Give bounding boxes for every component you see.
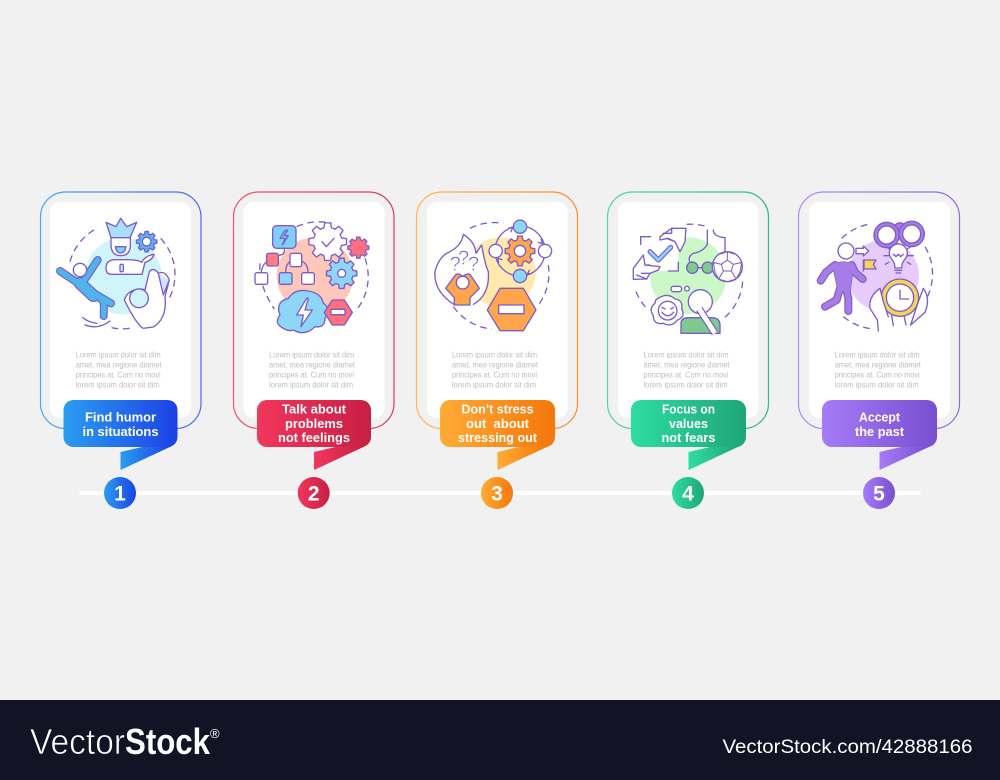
- text block: lorem ipsum: [835, 350, 921, 390]
- callout: talk about problems not feelings: problems: [285, 416, 343, 431]
- text block: lorem ipsum: amet, mea regione diamet: [644, 360, 730, 370]
- number badge 5: 5: [873, 482, 885, 506]
- panel: step 4 focus on values: [608, 192, 768, 509]
- text block: lorem ipsum: amet, mea regione diamet: [269, 360, 356, 370]
- callout: talk about problems not feelings: [257, 400, 371, 470]
- number badge 3: [481, 477, 513, 509]
- image id: VectorStock.com/42888166: [722, 737, 972, 758]
- text block: lorem ipsum: [452, 350, 539, 390]
- callout: find humor in situations: [64, 400, 178, 470]
- callout: focus on values not fears: values: [669, 416, 708, 431]
- panel: step 2 talk about problems: [234, 192, 394, 509]
- icon: stressed person in flames, gear cycle and stop sign: ?: [458, 247, 469, 269]
- text block: lorem ipsum: lorem ipsum dolor sit dim: [76, 380, 160, 390]
- icon: flowchart, gears and cloud: [255, 222, 369, 333]
- text block: lorem ipsum: amet, mea regione diamet: [452, 360, 539, 370]
- number badge 2: [298, 477, 330, 509]
- footer bar: [0, 700, 1000, 780]
- callout: focus on values not fears: not fears: [662, 430, 716, 445]
- callout: focus on values not fears: [631, 400, 746, 470]
- icon: stressed person in flames, gear cycle and stop sign: [435, 220, 552, 331]
- text block: lorem ipsum: Lorem ipsum dolor sit dim: [644, 350, 729, 360]
- icon: falling person, jester and ok hand: [60, 218, 175, 329]
- callout: don't stress out about stressing out: stressing out: [458, 430, 538, 445]
- panel: step 1 find humor: [40, 192, 201, 509]
- callout: find humor in situations: Find humor: [85, 410, 156, 425]
- text block: lorem ipsum: principes at. Cum no movi: [452, 370, 537, 380]
- number badge 2: 2: [308, 482, 320, 506]
- icon: stressed person in flames, gear cycle and stop sign: ?: [450, 253, 461, 275]
- text block: lorem ipsum: Lorem ipsum dolor sit dim: [269, 350, 354, 360]
- number badge 5: [863, 477, 895, 509]
- callout: find humor in situations: in situations: [82, 424, 158, 439]
- text block: lorem ipsum: Lorem ipsum dolor sit dim: [76, 350, 161, 360]
- number badge 1: 1: [114, 482, 126, 506]
- panel: step 5 accept the past: [798, 192, 960, 509]
- logo: VectorStock: Stock: [125, 721, 211, 762]
- number badge 4: [672, 477, 704, 509]
- icon: walking person, binoculars, light bulb and clock: [821, 221, 933, 331]
- callout: talk about problems not feelings: not feelings: [278, 430, 350, 445]
- callout: accept the past: the past: [855, 424, 905, 439]
- callout: accept the past: [822, 400, 937, 470]
- callout: focus on values not fears: Focus on: [662, 402, 715, 417]
- panel: step 3 don't stress: [416, 192, 578, 509]
- text block: lorem ipsum: Lorem ipsum dolor sit dim: [835, 350, 920, 360]
- number badge 3: 3: [491, 482, 503, 506]
- callout: don't stress out about stressing out: Don’t stress: [462, 402, 534, 417]
- logo: VectorStock: Vector: [30, 721, 125, 762]
- logo: VectorStock: [30, 721, 220, 762]
- text block: lorem ipsum: principes at. Cum no movi: [76, 370, 161, 380]
- icon: framing hands, football and smiling flower: [633, 224, 743, 333]
- text block: lorem ipsum: principes at. Cum no movi: [835, 370, 920, 380]
- callout: accept the past: Accept: [859, 410, 901, 425]
- text block: lorem ipsum: principes at. Cum no movi: [644, 370, 729, 380]
- text block: lorem ipsum: lorem ipsum dolor sit dim: [644, 380, 728, 390]
- number badge 4: 4: [682, 482, 694, 506]
- number badge 1: [104, 477, 136, 509]
- text block: lorem ipsum: Lorem ipsum dolor sit dim: [452, 350, 537, 360]
- text block: lorem ipsum: lorem ipsum dolor sit dim: [835, 380, 919, 390]
- callout: don't stress out about stressing out: out about: [466, 416, 530, 431]
- text block: lorem ipsum: amet, mea regione diamet: [76, 360, 162, 370]
- text block: lorem ipsum: lorem ipsum dolor sit dim: [452, 380, 536, 390]
- text block: lorem ipsum: [76, 350, 162, 390]
- icon: stressed person in flames, gear cycle and stop sign: ?: [468, 253, 479, 275]
- text block: lorem ipsum: [269, 350, 356, 390]
- text block: lorem ipsum: principes at. Cum no movi: [269, 370, 354, 380]
- text block: lorem ipsum: lorem ipsum dolor sit dim: [269, 380, 353, 390]
- text block: lorem ipsum: amet, mea regione diamet: [835, 360, 921, 370]
- text block: lorem ipsum: [644, 350, 730, 390]
- timeline line: [79, 491, 921, 495]
- logo: VectorStock: ®: [210, 726, 220, 741]
- callout: talk about problems not feelings: Talk about: [282, 402, 347, 417]
- callout: don't stress out about stressing out: [440, 400, 555, 470]
